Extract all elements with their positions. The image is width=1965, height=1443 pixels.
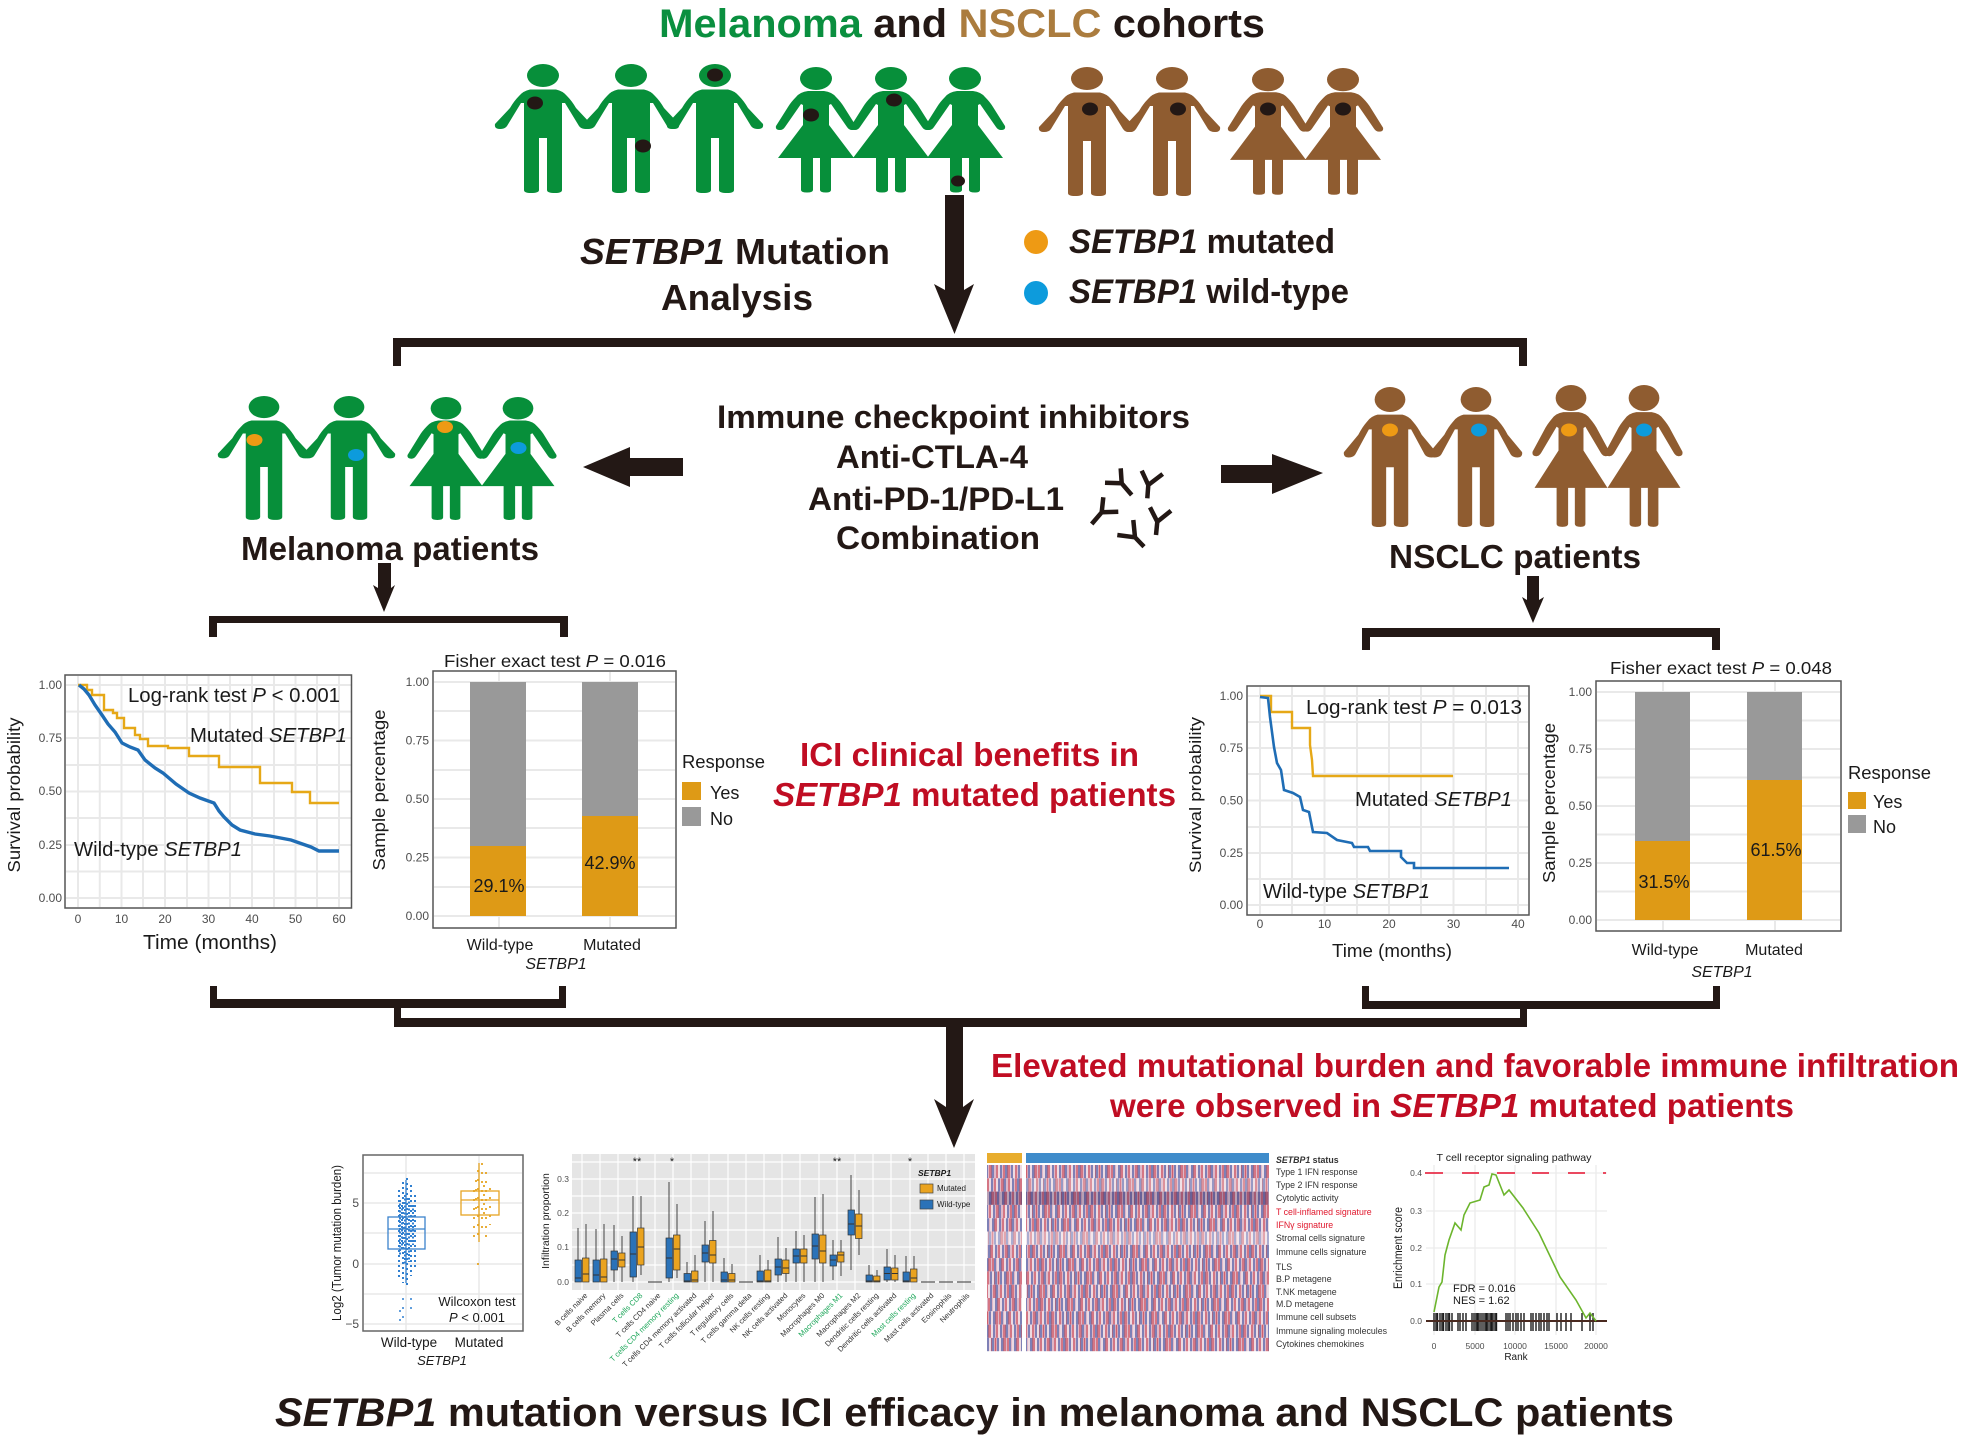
axis labels: immune cell types: Mast cells resting — [870, 1291, 917, 1339]
arrow: to NSCLC patients — [1221, 454, 1323, 494]
chart: melanoma survival curve: 0.50 — [39, 784, 62, 798]
legend: NSCLC response: Response — [1848, 763, 1931, 783]
chart: NSCLC response bars: 0.50 — [1569, 799, 1592, 813]
legend: melanoma response: Response — [682, 752, 765, 772]
chart: melanoma response bars: 42.9% — [584, 853, 636, 873]
arrow: to bottom analyses — [934, 1027, 974, 1148]
curve: wild-type — [1260, 697, 1509, 868]
row labels: Cytokines chemokines — [1276, 1339, 1365, 1349]
row labels: T cell-inflamed signature — [1276, 1207, 1372, 1217]
points: wild-type — [399, 1178, 415, 1324]
chart: melanoma survival curve: 10 — [115, 912, 128, 926]
curve: mutated — [78, 685, 339, 803]
chart: NSCLC survival curve: 0.00 — [1220, 898, 1243, 912]
chart: melanoma response bars: Wild-type — [467, 937, 533, 954]
chart: immune infiltration boxplots: 0.0 — [557, 1277, 569, 1287]
points: mutated — [474, 1163, 490, 1265]
row labels: Type 2 IFN response — [1276, 1180, 1358, 1190]
chart: NSCLC response bars — [1539, 658, 1931, 981]
label: NSCLC patients: NSCLC patients — [1389, 538, 1641, 575]
axis labels: immune cell types: T regulatory cells — [688, 1291, 736, 1338]
heat rows — [987, 1165, 1269, 1351]
chart: melanoma response bars: 1.00 — [406, 675, 429, 689]
chart: NSCLC survival curve: 0 — [1257, 917, 1264, 931]
legend: NSCLC response — [1848, 763, 1931, 837]
chart: NSCLC survival curve: 0.50 — [1220, 794, 1243, 808]
chart: NSCLC survival curve: Survival probability — [1186, 716, 1205, 873]
chart: melanoma survival curve: 0.00 — [39, 891, 62, 905]
chart: melanoma response bars: 0.50 — [406, 792, 429, 806]
chart: NSCLC response bars: 31.5% — [1638, 872, 1690, 892]
row labels: Immune cells signature — [1276, 1247, 1367, 1257]
boxes: wild-type — [575, 1210, 910, 1282]
arrow: NSCLC down — [1522, 576, 1544, 623]
legend: melanoma response: Yes — [710, 783, 739, 803]
axis labels: immune cell types — [553, 1291, 972, 1369]
text: immune checkpoint inhibitors — [717, 399, 1190, 556]
curve: wild-type — [79, 685, 339, 851]
heading: mutation analysis: Analysis — [661, 277, 813, 318]
text: immune checkpoint inhibitors: Combination — [836, 520, 1040, 556]
callout: ICI clinical benefits — [773, 736, 1176, 813]
bracket: NSCLC split — [1362, 628, 1720, 650]
legend: infiltration — [918, 1168, 971, 1209]
icon: antibodies — [1092, 468, 1171, 547]
chart: melanoma survival curve: 20 — [158, 912, 172, 926]
chart: tumor mutation burden boxplot: Mutated — [455, 1335, 503, 1350]
chart: NSCLC response bars: Fisher exact test P = 0.048 — [1610, 658, 1832, 678]
heading: mutation analysis: SETBP1 Mutation — [580, 231, 890, 272]
whiskers — [578, 1175, 914, 1282]
chart: melanoma survival curve: Mutated SETBP1 — [190, 725, 347, 747]
axis labels: immune cell types: T cells follicular helper — [657, 1291, 717, 1350]
axis labels: immune cell types: Mast cells activated — [882, 1291, 935, 1344]
significance dashes — [1425, 1172, 1606, 1174]
chart: NSCLC response bars: Wild-type — [1632, 942, 1698, 959]
chart: NSCLC response bars: 61.5% — [1750, 840, 1802, 860]
chart: immune infiltration boxplots — [540, 1154, 975, 1369]
chart: enrichment plot: T cell receptor signaling pathway — [1436, 1152, 1592, 1164]
bracket: combined merge — [394, 1008, 1527, 1027]
chart: immune infiltration boxplots: 0.2 — [557, 1208, 569, 1218]
chart: tumor mutation burden boxplot: 5 — [352, 1196, 359, 1210]
chart: NSCLC survival curve — [1186, 686, 1529, 961]
axis labels: immune cell types: B cells memory — [564, 1291, 608, 1334]
chart: enrichment plot: 0.4 — [1410, 1168, 1422, 1178]
heatmap: immune signatures — [987, 1153, 1388, 1351]
axis labels: immune cell types: Plasma cells — [589, 1291, 626, 1328]
row labels: M.D metagene — [1276, 1299, 1334, 1309]
chart: enrichment plot: Rank — [1504, 1352, 1529, 1363]
chart: melanoma survival curve: 1.00 — [39, 678, 62, 692]
icon group: NSCLC patient figures — [1344, 385, 1683, 527]
title: main conclusion: SETBP1 mutation versus ICI efficacy in melanoma and NSCLC patients — [275, 1391, 1674, 1435]
chart: immune infiltration boxplots: * — [908, 1156, 913, 1168]
chart: melanoma response bars: 0.00 — [406, 909, 429, 923]
icon group: melanoma cohort figures — [495, 64, 1005, 193]
callout: elevated mutational burden: Elevated mutational burden and favorable immune infiltration — [991, 1047, 1959, 1084]
status bars — [987, 1153, 1269, 1163]
chart: NSCLC survival curve: Log-rank test P = 0.013 — [1306, 697, 1522, 719]
row labels: IFNγ signature — [1276, 1220, 1333, 1230]
chart: enrichment plot: 20000 — [1584, 1341, 1608, 1351]
chart: NSCLC survival curve: Wild-type SETBP1 — [1263, 881, 1430, 903]
chart: melanoma survival curve: 50 — [289, 912, 302, 926]
row labels: Stromal cells signature — [1276, 1233, 1365, 1243]
text: immune checkpoint inhibitors: Anti-CTLA-4 — [836, 439, 1028, 475]
chart: NSCLC survival curve: Mutated SETBP1 — [1355, 789, 1512, 811]
chart: NSCLC response bars: 1.00 — [1569, 685, 1592, 699]
chart: NSCLC survival curve: 0.25 — [1220, 846, 1243, 860]
chart: tumor mutation burden boxplot: Wild-type — [381, 1335, 437, 1350]
chart: immune infiltration boxplots: * — [670, 1156, 675, 1168]
legend: NSCLC response: No — [1873, 817, 1896, 837]
chart: NSCLC response bars: Sample percentage — [1539, 723, 1559, 883]
text: immune checkpoint inhibitors: Anti-PD-1/PD-L1 — [808, 481, 1064, 517]
chart: tumor mutation burden boxplot: 0 — [352, 1257, 359, 1271]
chart: enrichment plot: 0 — [1432, 1341, 1437, 1351]
chart: melanoma response bars: 0.25 — [406, 850, 429, 864]
icon group: NSCLC cohort figures — [1039, 67, 1383, 196]
arrow: melanoma down — [373, 563, 395, 612]
chart: tumor mutation burden boxplot: −5 — [345, 1317, 359, 1331]
axis labels: immune cell types: Dendritic cells resting — [823, 1291, 880, 1348]
arrow: to melanoma patients — [583, 447, 683, 487]
chart: NSCLC response bars: 0.75 — [1569, 742, 1592, 756]
label: melanoma patients: Melanoma patients — [241, 530, 539, 567]
boxes: mutated — [582, 1214, 917, 1282]
chart: enrichment plot: 0.0 — [1410, 1316, 1422, 1326]
text: immune checkpoint inhibitors: Immune checkpoint inhibitors — [717, 399, 1190, 435]
chart: tumor mutation burden boxplot: P < 0.001 — [449, 1310, 505, 1325]
chart: enrichment plot: 5000 — [1466, 1341, 1485, 1351]
icon group: melanoma patient figures — [218, 396, 557, 520]
chart: NSCLC survival curve: 40 — [1511, 917, 1525, 931]
legend: mutation status — [1024, 223, 1349, 311]
axis labels: immune cell types: Eosinophils — [920, 1291, 954, 1325]
legend: melanoma response — [682, 752, 765, 829]
running score curve — [1434, 1174, 1596, 1321]
chart: immune infiltration boxplots: 0.3 — [557, 1174, 569, 1184]
chart: melanoma survival curve: Wild-type SETBP1 — [74, 839, 242, 861]
medians — [575, 1224, 971, 1282]
axis labels: immune cell types: T cells gamma delta — [699, 1291, 754, 1345]
chart: NSCLC response bars: 0.00 — [1569, 913, 1592, 927]
row labels: TLS — [1276, 1262, 1292, 1272]
arrow: cohort to mutation split — [934, 195, 974, 334]
legend: infiltration: Wild-type — [937, 1200, 971, 1209]
chart: immune infiltration boxplots: ** — [833, 1156, 842, 1168]
row labels: Immune cell subsets — [1276, 1312, 1357, 1322]
axis labels: immune cell types: Dendritic cells activated — [836, 1291, 898, 1354]
row tints — [987, 1178, 1269, 1245]
chart: melanoma response bars: SETBP1 — [525, 956, 587, 973]
callout: ICI clinical benefits: ICI clinical benefits in — [800, 736, 1139, 773]
heading: mutation analysis — [580, 231, 890, 318]
chart: immune infiltration boxplots: 0.1 — [557, 1242, 569, 1252]
chart: immune infiltration boxplots: Infiltration proportion — [540, 1173, 552, 1269]
chart: melanoma survival curve: Log-rank test P < 0.001 — [128, 685, 340, 707]
chart: NSCLC response bars: Mutated — [1745, 942, 1803, 959]
chart: enrichment plot: Enrichment score — [1393, 1207, 1405, 1289]
chart: melanoma response bars — [369, 651, 765, 973]
axis labels: immune cell types: NK cells activated — [740, 1291, 789, 1340]
callout: ICI clinical benefits: SETBP1 mutated patients — [773, 776, 1176, 813]
axis labels: immune cell types: T cells CD4 memory resting — [608, 1291, 680, 1364]
chart: melanoma response bars: Sample percentage — [369, 709, 389, 871]
chart: NSCLC survival curve: Time (months) — [1332, 941, 1452, 961]
axis labels: immune cell types: NK cells resting — [728, 1291, 771, 1335]
axis labels: immune cell types: B cells naive — [553, 1291, 589, 1328]
axis labels: immune cell types: T cells CD4 memory activated — [621, 1291, 698, 1369]
row labels: B.P metagene — [1276, 1274, 1332, 1284]
chart: enrichment plot: 0.3 — [1410, 1206, 1422, 1216]
row labels: SETBP1 status — [1276, 1155, 1339, 1165]
chart: tumor mutation burden boxplot: Wilcoxon test — [438, 1294, 516, 1309]
axis labels: immune cell types: Monocytes — [775, 1291, 808, 1323]
chart: melanoma survival curve: 0.75 — [39, 731, 62, 745]
curve: mutated — [1260, 696, 1453, 776]
chart: melanoma survival curve: 0 — [75, 912, 82, 926]
chart: melanoma response bars: Mutated — [583, 937, 641, 954]
chart: NSCLC survival curve: 20 — [1382, 917, 1396, 931]
chart: enrichment plot — [1393, 1152, 1608, 1363]
chart: tumor mutation burden boxplot — [330, 1155, 523, 1368]
legend: mutation status: SETBP1 wild-type — [1069, 273, 1349, 311]
bracket: melanoma split — [209, 616, 568, 637]
axis labels: immune cell types: Neutrophils — [938, 1291, 972, 1325]
axis labels: immune cell types: Macrophages M2 — [815, 1291, 862, 1339]
callout: elevated mutational burden — [991, 1047, 1959, 1124]
chart: melanoma survival curve: 40 — [245, 912, 259, 926]
legend: NSCLC response: Yes — [1873, 792, 1902, 812]
callout: elevated mutational burden: were observed in SETBP1 mutated patients — [1109, 1087, 1794, 1124]
chart: NSCLC survival curve: 1.00 — [1220, 689, 1243, 703]
chart: melanoma survival curve: 0.25 — [39, 838, 62, 852]
axis labels: immune cell types: Macrophages M0 — [779, 1291, 826, 1339]
row labels: Immune signaling molecules — [1276, 1326, 1388, 1336]
chart: NSCLC survival curve: 30 — [1447, 917, 1460, 931]
chart: enrichment plot: 0.2 — [1410, 1243, 1422, 1253]
chart: melanoma survival curve: 60 — [332, 912, 346, 926]
chart: melanoma survival curve: Time (months) — [143, 932, 277, 954]
legend: infiltration: Mutated — [937, 1184, 966, 1193]
row labels: Cytolytic activity — [1276, 1193, 1339, 1203]
legend: melanoma response: No — [710, 809, 733, 829]
chart: enrichment plot: FDR = 0.016 — [1453, 1283, 1516, 1295]
chart: NSCLC survival curve: 10 — [1318, 917, 1331, 931]
chart: melanoma response bars: 29.1% — [473, 876, 525, 896]
legend: infiltration: SETBP1 — [918, 1168, 951, 1178]
row labels — [1276, 1155, 1388, 1349]
chart: tumor mutation burden boxplot: Log2 (Tumor mutation burden) — [330, 1165, 344, 1321]
chart: NSCLC response bars: SETBP1 — [1691, 964, 1753, 981]
chart: enrichment plot: NES = 1.62 — [1453, 1295, 1510, 1307]
bracket: top split — [393, 338, 1527, 366]
chart: enrichment plot: 0.1 — [1410, 1279, 1422, 1289]
legend: mutation status: SETBP1 mutated — [1069, 223, 1335, 261]
chart: enrichment plot: 15000 — [1544, 1341, 1568, 1351]
bracket: melanoma merge — [210, 986, 566, 1008]
chart: melanoma response bars: Fisher exact test P = 0.016 — [444, 651, 666, 671]
axis labels: immune cell types: Macrophages M1 — [797, 1291, 844, 1339]
hit rug — [1434, 1313, 1593, 1331]
chart: NSCLC survival curve: 0.75 — [1220, 741, 1243, 755]
chart: immune infiltration boxplots: ** — [633, 1156, 642, 1168]
chart: melanoma survival curve: Survival probability — [4, 717, 24, 872]
row labels: T.NK metagene — [1276, 1287, 1337, 1297]
chart: NSCLC response bars: 0.25 — [1569, 856, 1592, 870]
axis labels: immune cell types: T cells CD8 — [610, 1291, 644, 1325]
bracket: NSCLC merge — [1362, 986, 1720, 1009]
chart: melanoma survival curve: 30 — [202, 912, 215, 926]
title: cohorts: Melanoma and NSCLC cohorts — [659, 2, 1265, 46]
axis labels: immune cell types: T cells CD4 naive — [614, 1291, 662, 1339]
chart: melanoma response bars: 0.75 — [406, 734, 429, 748]
chart: enrichment plot: 10000 — [1503, 1341, 1527, 1351]
chart: melanoma survival curve — [4, 675, 352, 954]
chart: tumor mutation burden boxplot: SETBP1 — [417, 1353, 467, 1368]
row labels: Type 1 IFN response — [1276, 1167, 1358, 1177]
